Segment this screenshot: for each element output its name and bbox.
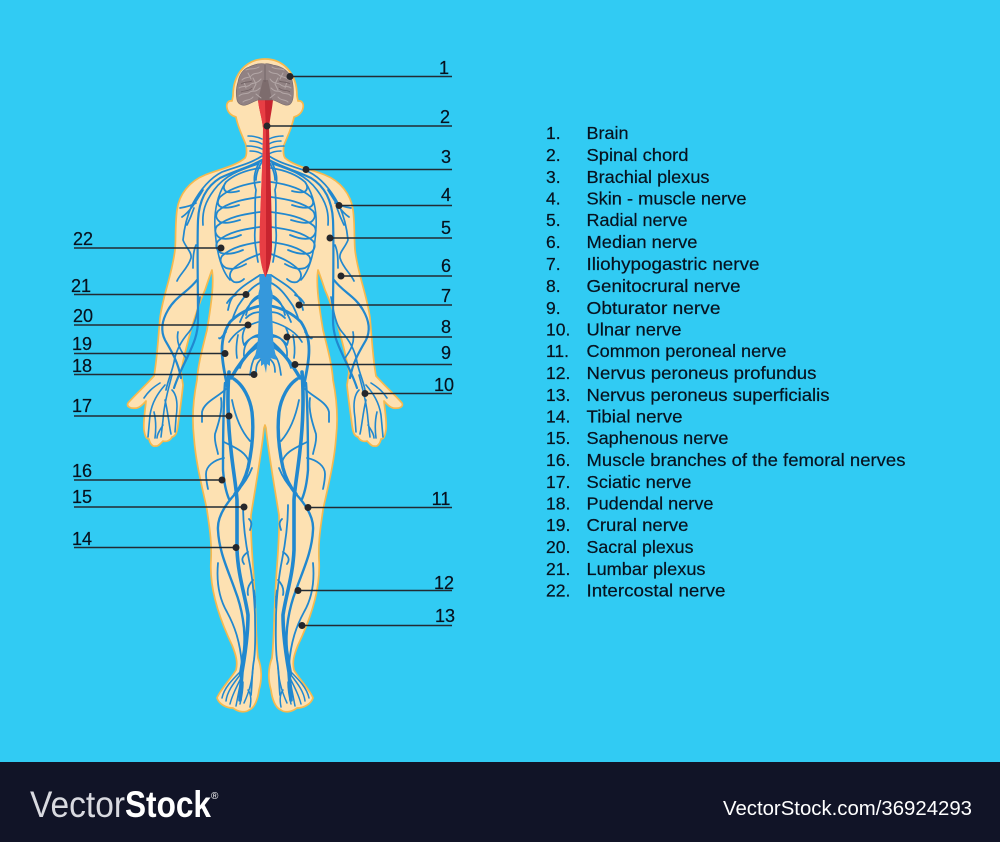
callout 8: 8 — [441, 317, 451, 337]
legend names — [586, 123, 906, 600]
legend names: Pudendal nerve — [586, 494, 714, 514]
leader lines and numbered callouts, left side — [71, 229, 258, 551]
callout 17: 17 — [72, 396, 92, 416]
callout 18 — [72, 356, 258, 378]
callout 11: 11 — [432, 489, 450, 509]
legend names: Ulnar nerve — [586, 320, 682, 340]
callout 2: 2 — [440, 107, 450, 127]
legend numbers: 11. — [546, 341, 569, 361]
legend names: Saphenous nerve — [586, 428, 728, 448]
callout 6: 6 — [441, 256, 451, 276]
callout 19: 19 — [72, 334, 92, 354]
footer logo: Vector — [30, 784, 125, 825]
callout 22: 22 — [73, 229, 93, 249]
femoral trunk — [231, 340, 262, 494]
callout 5 — [326, 218, 452, 242]
legend names: Brachial plexus — [586, 167, 710, 187]
legend names: Sciatic nerve — [586, 472, 692, 492]
foot nerves — [222, 668, 253, 707]
legend numbers: 22. — [546, 580, 570, 600]
footer logo: Stock — [125, 784, 211, 825]
callout 4: 4 — [441, 185, 451, 205]
nerve beside the spinal cord — [254, 160, 263, 262]
legend names: Spinal chord — [586, 145, 688, 165]
callout 18: 18 — [72, 356, 92, 376]
legend list of nerves — [546, 123, 906, 600]
legend numbers: 16. — [546, 450, 570, 470]
callout 17 — [72, 396, 232, 420]
legend numbers: 7. — [546, 254, 561, 274]
legend numbers: 21. — [546, 559, 570, 579]
callout 2 — [264, 107, 452, 130]
legend numbers: 1. — [546, 123, 561, 143]
sciatic nerve — [228, 372, 248, 700]
neck nerves — [247, 136, 262, 154]
callout 7: 7 — [441, 286, 451, 306]
legend names: Nervus peroneus profundus — [586, 363, 817, 383]
legend numbers: 10. — [546, 320, 570, 340]
legend names: Tibial nerve — [586, 406, 682, 426]
callout 7 — [296, 286, 452, 308]
callout 10 — [362, 375, 454, 397]
sacral plexus — [222, 306, 260, 390]
callout 14 — [72, 529, 240, 551]
callout 20: 20 — [73, 306, 93, 326]
legend names: Skin - muscle nerve — [586, 188, 746, 208]
brain — [236, 64, 293, 105]
footer logo — [30, 784, 219, 825]
legend numbers: 15. — [546, 428, 570, 448]
callout 16: 16 — [72, 461, 92, 481]
legend names: Obturator nerve — [586, 298, 720, 318]
legend numbers: 19. — [546, 515, 570, 535]
callout 4 — [336, 185, 452, 209]
legend numbers: 18. — [546, 494, 570, 514]
callout 12: 12 — [434, 573, 454, 593]
legend numbers: 2. — [546, 145, 561, 165]
callout 13: 13 — [435, 606, 455, 626]
legend numbers: 17. — [546, 472, 570, 492]
callout 11 — [304, 489, 452, 511]
legend names: Radial nerve — [586, 210, 688, 230]
legend numbers: 14. — [546, 406, 570, 426]
legend names: Crural nerve — [586, 515, 688, 535]
legend numbers: 6. — [546, 232, 561, 252]
callout 8 — [284, 317, 452, 340]
callout 9: 9 — [441, 343, 451, 363]
callout 21: 21 — [71, 276, 91, 296]
legend names: Common peroneal nerve — [586, 341, 786, 361]
nerves: mirrored network — [144, 136, 387, 707]
footer logo: ® — [211, 791, 219, 802]
footer url: VectorStock.com/36924293 — [723, 798, 972, 820]
rib cage outer chain — [215, 182, 230, 280]
lumbar spinal cord (blue) — [254, 274, 277, 373]
legend names: Sacral plexus — [586, 537, 694, 557]
legend numbers: 5. — [546, 210, 561, 230]
callout 21 — [71, 276, 250, 298]
legend numbers: 13. — [546, 385, 570, 405]
human body figure — [128, 59, 402, 712]
lower leg nerves — [217, 505, 255, 695]
brain folds — [239, 67, 291, 102]
legend numbers: 9. — [546, 298, 561, 318]
legend names: Nervus peroneus superficialis — [586, 385, 830, 405]
callout 5: 5 — [441, 218, 451, 238]
callout 22 — [73, 229, 224, 252]
legend names: Lumbar plexus — [586, 559, 706, 579]
secondary thigh nerves — [218, 383, 245, 674]
legend numbers: 3. — [546, 167, 561, 187]
legend numbers: 12. — [546, 363, 570, 383]
legend names: Genitocrural nerve — [586, 276, 740, 296]
legend names: Muscle branches of the femoral nerves — [586, 450, 906, 470]
callout 10: 10 — [434, 375, 454, 395]
body silhouette — [128, 59, 402, 712]
callout 19 — [72, 334, 228, 357]
legend names: Iliohypogastric nerve — [586, 254, 760, 274]
leader lines and numbered callouts, right side — [264, 58, 455, 629]
callout 1 — [286, 58, 452, 80]
legend numbers — [546, 123, 570, 600]
legend numbers: 20. — [546, 537, 570, 557]
callout 15 — [72, 487, 248, 510]
legend numbers: 8. — [546, 276, 561, 296]
brachial plexus and upper arm — [174, 160, 262, 388]
footer bar — [0, 762, 1000, 842]
callout 14: 14 — [72, 529, 92, 549]
callout 9 — [292, 343, 452, 368]
legend names: Brain — [586, 123, 628, 143]
lumbar plexus — [227, 275, 262, 322]
callout 13 — [298, 606, 455, 629]
callout 15: 15 — [72, 487, 92, 507]
thigh branches — [202, 389, 252, 490]
callout 3 — [302, 147, 452, 173]
legend names: Intercostal nerve — [586, 580, 726, 600]
callout 1: 1 — [439, 58, 449, 78]
callout 3: 3 — [441, 147, 451, 167]
hand nerves — [144, 375, 177, 438]
callout 20 — [73, 306, 252, 328]
spinal cord (red) — [258, 100, 273, 277]
callout 12 — [294, 573, 454, 594]
legend names: Median nerve — [586, 232, 698, 252]
callout 6 — [338, 256, 452, 280]
callout 16 — [72, 461, 226, 484]
forearm nerves — [162, 280, 197, 378]
legend numbers: 4. — [546, 188, 561, 208]
ribs and intercostal nerves — [215, 168, 260, 282]
